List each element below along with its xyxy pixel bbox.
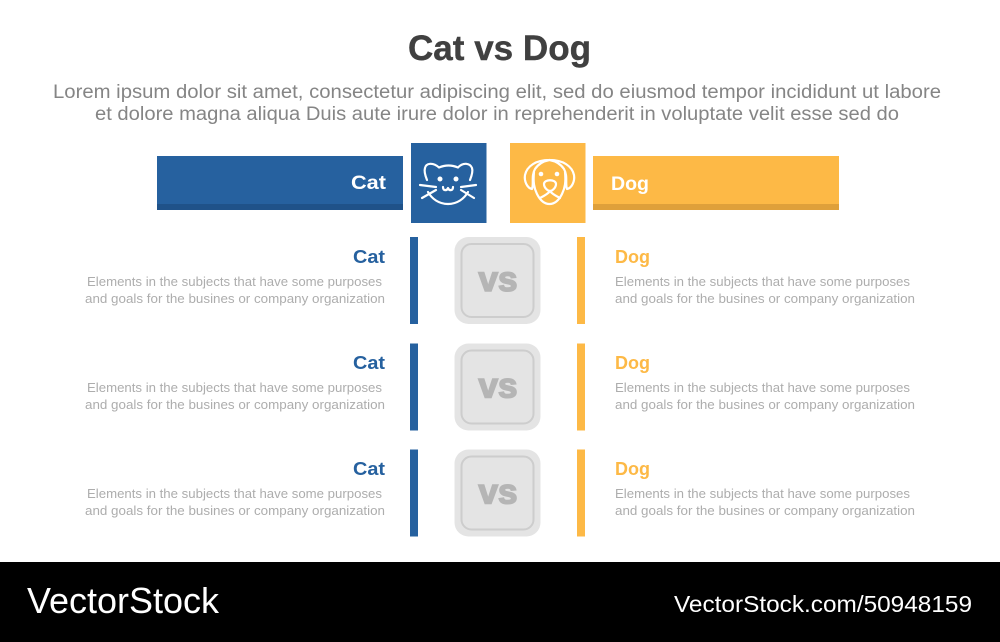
footer watermark bar [0,562,1000,642]
row 2 cat text: Cat [353,353,385,373]
row 1 dog text: Dog [615,247,650,267]
subtitle text [53,82,941,125]
header bar: Cat [157,156,403,210]
row 2 cat text [85,353,385,412]
row 2 dog text: Dog [615,353,650,373]
row 3 dog text [615,459,915,518]
row 3 dog text: Dog [615,459,650,479]
row 1 [85,237,915,324]
row 3 cat text: Cat [353,459,385,479]
title: Cat vs Dog [408,29,591,68]
icon: cat face [411,143,486,223]
row 1 dog text: and goals for the busines or company organization [615,291,915,306]
row 1 cat text: Elements in the subjects that have some purposes [87,274,383,289]
row 1 vs badge [454,237,540,324]
row 2 [85,344,915,430]
subtitle text: Lorem ipsum dolor sit amet, consectetur adipiscing elit, sed do eiusmod tempor incididunt ut labore [53,82,941,103]
row 3 cat text [85,459,385,518]
footer watermark bar: VectorStock [27,580,220,621]
row 2 cat text: Elements in the subjects that have some purposes [87,380,383,395]
footer watermark bar: VectorStock.com/50948159 [674,591,972,617]
row 3 dog text: Elements in the subjects that have some purposes [615,486,911,501]
row 2 dog text: and goals for the busines or company organization [615,397,915,412]
row 2 dog text: Elements in the subjects that have some purposes [615,380,911,395]
row 1 cat text: Cat [353,247,385,267]
icon: dog face [510,143,586,223]
header bar: Dog: Dog [611,173,649,195]
row 2 dog text [615,353,915,412]
row 3 [85,450,915,536]
row 3 cat divider [410,450,418,536]
row 2 vs badge [454,344,540,430]
row 3 cat text: and goals for the busines or company organization [85,503,385,518]
row 3 cat text: Elements in the subjects that have some purposes [87,486,383,501]
row 3 vs badge: vs [478,472,518,512]
row 1 dog text: Elements in the subjects that have some purposes [615,274,911,289]
row 2 vs badge: vs [478,366,518,406]
row 3 dog divider [577,450,585,536]
row 2 dog divider [577,344,585,430]
row 1 dog divider [577,237,585,324]
row 3 vs badge [454,450,540,536]
row 1 cat divider [410,237,418,324]
row 1 vs badge: vs [478,260,518,299]
subtitle text: et dolore magna aliqua Duis aute irure dolor in reprehenderit in voluptate velit esse sed do [95,104,899,125]
row 1 cat text: and goals for the busines or company organization [85,291,385,306]
header bar: Cat: Cat [351,172,387,194]
row 1 dog text [615,247,915,306]
row 2 cat text: and goals for the busines or company organization [85,397,385,412]
header bar: Dog [593,156,839,210]
row 1 cat text [85,247,385,306]
row 3 dog text: and goals for the busines or company organization [615,503,915,518]
row 2 cat divider [410,344,418,430]
